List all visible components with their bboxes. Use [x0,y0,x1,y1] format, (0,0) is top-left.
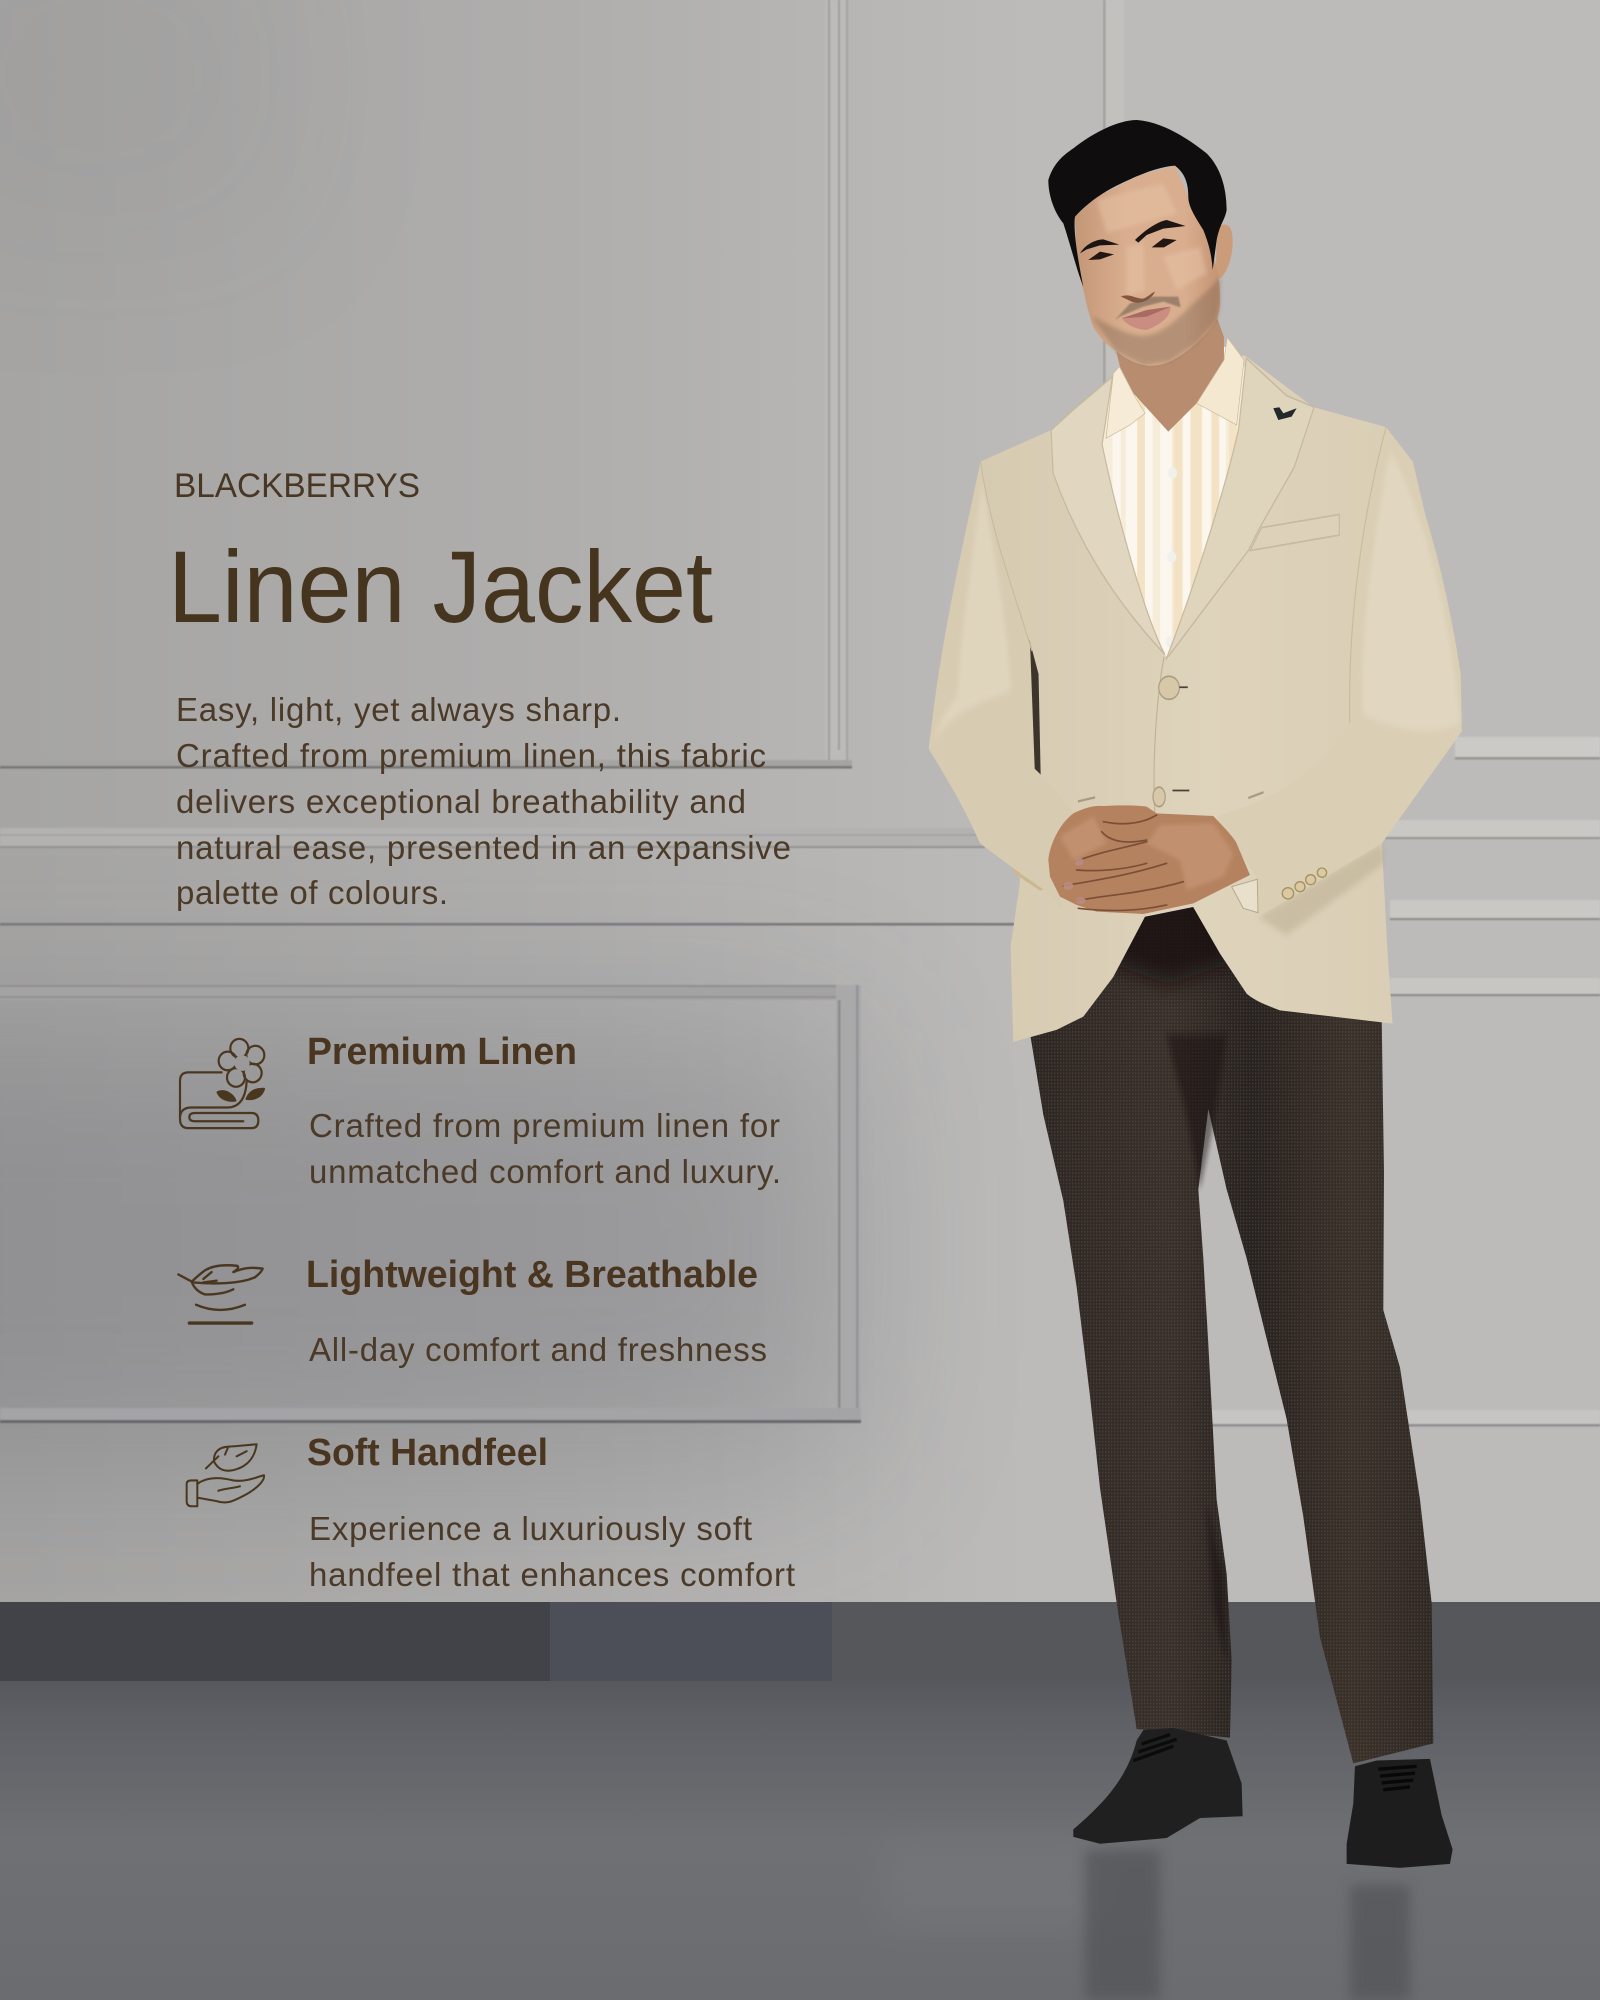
floor and baseboard [0,1602,1600,2000]
intro paragraph: Easy, light, yet always sharp. [176,691,621,728]
breast pocket [1250,514,1339,551]
feature: premium linen [180,1031,781,1190]
right shoe [1347,1759,1453,1868]
shoe reflections [1085,1850,1410,2000]
heading: Premium Linen [307,1031,577,1073]
trousers [1028,902,1433,1763]
hair [1048,120,1227,287]
heading: Lightweight & Breathable [306,1254,758,1296]
intro paragraph: natural ease, presented in an expansive [176,829,791,866]
intro paragraph [176,691,791,911]
description: Experience a luxuriously soft [309,1510,752,1547]
description [309,1107,781,1190]
left sleeve [929,462,1073,910]
left shoe laces [1133,1735,1177,1761]
left lapel [1051,377,1165,654]
moustache [1115,297,1181,320]
lapel pin [1273,407,1297,420]
description [309,1510,795,1593]
cheek highlight [1097,183,1207,297]
stubble [1092,277,1220,365]
trouser fold shading [1167,1034,1227,1660]
intro paragraph: Crafted from premium linen, this fabric [176,737,766,774]
left shoe [1073,1728,1243,1844]
finger shading [1063,815,1183,911]
left cuff button strip [1012,868,1043,891]
jacket buttons [1153,676,1179,807]
jacket side shadow [1029,640,1041,783]
description: Crafted from premium linen for [309,1107,780,1144]
hands [1048,805,1250,914]
feature: lightweight and breathable [178,1254,767,1368]
jacket group [929,347,1462,1042]
title: Linen Jacket [168,530,713,644]
model: trousers and shoes [1028,902,1453,1868]
intro paragraph: delivers exceptional breathability and [176,783,746,820]
shirt [1102,346,1245,660]
model: upper body [929,120,1462,1042]
face [1075,166,1220,366]
dark trouser opening shading [1107,881,1237,984]
neck [1115,317,1224,432]
description: handfeel that enhances comfort [309,1556,795,1593]
right sleeve [1216,427,1462,917]
left collar [1106,367,1145,438]
feature: soft handfeel [187,1432,795,1593]
brand name: BLACKBERRYS [174,467,420,505]
right lapel [1166,358,1314,660]
jacket torso [980,355,1436,1042]
heading: Soft Handfeel [307,1432,548,1474]
right shirt cuff [1232,879,1258,913]
description: unmatched comfort and luxury. [309,1153,781,1190]
left sleeve highlight [933,479,1011,743]
flap pockets [1078,792,1264,801]
icon: hand with leaf [187,1444,264,1506]
wall mouldings [0,0,1600,1426]
finger tips [1063,858,1086,904]
eyebrows [1080,220,1186,253]
jacket centre edge [1153,657,1164,912]
intro paragraph: palette of colours. [176,874,448,911]
lips [1122,307,1171,330]
photo background: wall [0,0,868,1602]
trouser weave [1028,902,1433,1763]
shirt buttons [1166,467,1177,648]
back of hand highlights [1060,817,1233,890]
icon: towel with flower [180,1039,264,1128]
sleeve seams [980,427,1386,723]
shadow under right sleeve [1258,843,1384,935]
eyes [1088,238,1177,260]
right shoe laces [1378,1766,1417,1790]
right cuff buttons [1282,868,1327,899]
right collar [1197,337,1244,425]
right sleeve highlight [1362,450,1460,731]
nose shadow [1121,292,1155,303]
head and collar [1048,120,1297,438]
description: All-day comfort and freshness [309,1331,767,1368]
ear [1216,225,1233,279]
icon: feather [178,1265,263,1323]
shirt cuff, hands and sleeve buttons [1012,805,1327,914]
